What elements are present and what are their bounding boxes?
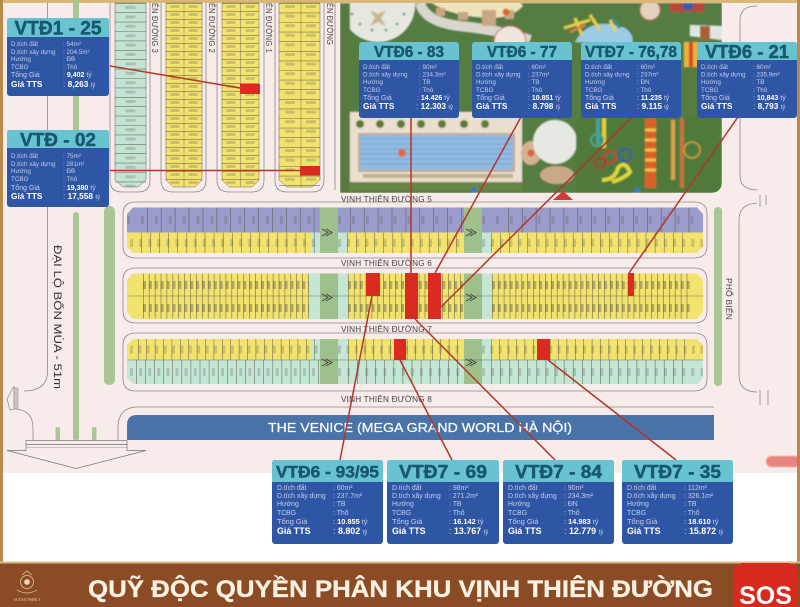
card: VTĐ6 - 83: : 14.426 tỷ	[417, 95, 450, 102]
card: VTĐ7 - 76,78: VTĐ7 - 76,78	[585, 44, 677, 61]
card: VTĐ7 - 76,78: : 11.235 tỷ	[637, 95, 670, 102]
SOS button	[733, 563, 798, 607]
card: VTĐ7 - 84: Giá TTS	[508, 526, 542, 536]
card: VTĐ7 - 69: TCBG	[392, 510, 411, 517]
road labels: VỊNH THIÊN ĐƯỜNG 8	[341, 394, 432, 404]
card: VTĐ7 - 84	[503, 460, 614, 544]
card: VTĐ7 - 84: : 14.983 tỷ	[564, 517, 599, 526]
road labels: ÊN ĐƯỜNG	[325, 3, 335, 45]
road labels: VỊNH THIÊN ĐƯỜNG 6	[341, 258, 432, 268]
card: VTĐ7 - 76,78: : 237m²	[637, 72, 658, 78]
card: VTĐ6 - 93/95: D.tích xây dựng	[277, 493, 326, 500]
road labels: PHỐ BIỂN	[724, 278, 735, 320]
card: VTĐ7 - 35: Hướng	[627, 501, 649, 508]
card: VTĐ7 - 35	[622, 460, 733, 544]
card: VTĐ6 - 83: : TB	[419, 79, 430, 86]
card: VTĐ - 02: : 19,380 tỷ	[63, 185, 96, 192]
card: VTĐ7 - 84: : 90m²	[564, 485, 584, 492]
road labels	[150, 3, 735, 404]
card: VTĐ7 - 69	[387, 460, 499, 544]
gate west	[7, 386, 18, 410]
card: VTĐ - 02: : 281m²	[63, 161, 84, 168]
road labels: VỊNH THIÊN ĐƯỜNG 5	[341, 194, 432, 204]
card: VTĐ7 - 69: : 271.2m²	[449, 493, 479, 500]
card: VTĐ1 - 25: D.tích xây dựng	[11, 49, 56, 56]
card: VTĐ6 - 93/95	[272, 460, 383, 544]
card: VTĐ6 - 83: : 234.3m²	[419, 72, 446, 78]
card: VTĐ7 - 69: : 16.142 tỷ	[449, 517, 484, 526]
card: VTĐ7 - 35: : TB	[684, 501, 697, 508]
card: VTĐ6 - 83: : Thô	[419, 87, 434, 94]
card: VTĐ7 - 35: : Thô	[684, 510, 700, 517]
card: VTĐ7 - 35: D.tích đất	[627, 483, 657, 492]
card: VTĐ7 - 84: D.tích xây dựng	[508, 493, 557, 500]
card: VTĐ - 02: Giá TTS	[11, 191, 43, 201]
card: VTĐ6 - 77: : TB	[528, 79, 539, 86]
south entrance arrow	[7, 440, 146, 468]
Venice boulevard bar	[127, 415, 714, 440]
card: VTĐ6 - 21: Tổng Giá	[701, 94, 730, 102]
card: VTĐ6 - 83: Giá TTS	[363, 101, 395, 111]
card: VTĐ7 - 69: : Thô	[449, 510, 465, 517]
card: VTĐ7 - 84: D.tích đất	[508, 483, 538, 492]
compass triangle	[553, 191, 573, 200]
card: VTĐ6 - 83: Tổng Giá	[363, 94, 392, 102]
card: VTĐ6 - 83: : 90m²	[419, 64, 437, 71]
card: VTĐ6 - 93/95: : TB	[333, 501, 346, 508]
card: VTĐ7 - 76,78: : 9.115 tỷ	[637, 101, 669, 111]
card: VTĐ6 - 77: : Thô	[528, 87, 543, 94]
road labels: ÊN ĐƯỜNG 1	[264, 3, 274, 53]
card: VTĐ1 - 25: : 204.5m²	[63, 49, 90, 56]
card: VTĐ7 - 69: Tổng Giá	[392, 517, 423, 526]
card: VTĐ6 - 21: VTĐ6 - 21	[705, 42, 789, 62]
card: VTĐ6 - 93/95: VTĐ6 - 93/95	[276, 464, 379, 482]
card: VTĐ6 - 83: D.tích xây dựng	[363, 72, 408, 78]
card: VTĐ1 - 25: Giá TTS	[11, 79, 43, 89]
card: VTĐ6 - 21	[697, 42, 797, 118]
card: VTĐ - 02: Hướng	[11, 168, 31, 175]
card: VTĐ1 - 25: : 8,263 tỷ	[63, 79, 95, 89]
card: VTĐ7 - 76,78: D.tích xây dựng	[585, 72, 630, 78]
card: VTĐ - 02: VTĐ - 02	[20, 130, 96, 150]
card: VTĐ - 02: TCBG	[11, 176, 29, 183]
card: VTĐ7 - 69: Giá TTS	[392, 526, 426, 536]
footer band	[0, 562, 800, 607]
card: VTĐ7 - 69: : 13.767 tỷ	[449, 526, 488, 536]
card: VTĐ7 - 84: Hướng	[508, 501, 530, 508]
card: VTĐ - 02: D.tích xây dựng	[11, 161, 56, 168]
card: VTĐ7 - 35: Tổng Giá	[627, 517, 658, 526]
card: VTĐ7 - 76,78: TCBG	[585, 87, 603, 94]
card: VTĐ6 - 77: D.tích đất	[476, 62, 503, 71]
road labels: ÊN ĐƯỜNG 3	[150, 3, 160, 53]
card: VTĐ1 - 25: VTĐ1 - 25	[14, 18, 102, 40]
lot block: vertical green	[115, 3, 146, 187]
card: VTĐ7 - 76,78: Giá TTS	[585, 101, 617, 111]
park illustration	[340, 0, 722, 193]
card: VTĐ6 - 77: Giá TTS	[476, 101, 508, 111]
card: VTĐ7 - 35: Giá TTS	[627, 526, 661, 536]
card: VTĐ7 - 76,78: Hướng	[585, 79, 605, 86]
card: VTĐ7 - 35: VTĐ7 - 35	[634, 462, 721, 482]
lot block: row between roads 6 and 7	[127, 274, 703, 319]
card: VTĐ7 - 84: VTĐ7 - 84	[515, 462, 602, 482]
card: VTĐ6 - 83: VTĐ6 - 83	[374, 44, 444, 61]
card: VTĐ7 - 69: D.tích xây dựng	[392, 493, 441, 500]
card: VTĐ6 - 77: : 60m²	[528, 64, 546, 71]
card: VTĐ6 - 83: TCBG	[363, 87, 381, 94]
card: VTĐ1 - 25	[7, 18, 109, 96]
highlighted lots	[240, 84, 634, 360]
card: VTĐ6 - 93/95: D.tích đất	[277, 483, 307, 492]
red smudge	[766, 456, 800, 467]
card: VTĐ7 - 69: VTĐ7 - 69	[399, 462, 487, 482]
card: VTĐ6 - 77: D.tích xây dựng	[476, 72, 521, 78]
card: VTĐ6 - 83: : 12.303 tỷ	[416, 101, 453, 111]
card: VTĐ7 - 35: : 15.872 tỷ	[684, 526, 723, 536]
card: VTĐ - 02: : 17,558 tỷ	[63, 191, 100, 201]
card: VTĐ6 - 93/95: : 10.855 tỷ	[333, 517, 368, 526]
lot block: vertical yellow 1	[166, 3, 202, 187]
card: VTĐ6 - 77: : 10.851 tỷ	[528, 95, 561, 102]
card: VTĐ6 - 21: : 235,9m²	[753, 72, 780, 78]
card: VTĐ7 - 84: TCBG	[508, 510, 527, 517]
card: VTĐ6 - 93/95: TCBG	[277, 510, 296, 517]
card: VTĐ1 - 25: : ĐB	[63, 56, 75, 63]
card: VTĐ6 - 93/95: Giá TTS	[277, 526, 311, 536]
footer title: QUỸ ĐỘC QUYỀN PHÂN KHU VỊNH THIÊN ĐƯỜNG	[88, 575, 713, 603]
boulevard label: ĐẠI LỘ BỐN MÙA - 51m	[51, 245, 65, 389]
card: VTĐ1 - 25: : 9,402 tỷ	[63, 72, 92, 79]
card: VTĐ6 - 77: VTĐ6 - 77	[487, 44, 557, 61]
card: VTĐ7 - 35: TCBG	[627, 510, 646, 517]
card: VTĐ6 - 77: : 8.798 tỷ	[528, 101, 560, 111]
card: VTĐ6 - 21: Hướng	[701, 79, 721, 86]
card: VTĐ7 - 84: Tổng Giá	[508, 517, 539, 526]
card: VTĐ6 - 77: Hướng	[476, 79, 496, 86]
card: VTĐ6 - 83	[359, 42, 459, 118]
card: VTĐ6 - 93/95: : 237.7m²	[333, 493, 363, 500]
card: VTĐ6 - 21: TCBG	[701, 87, 719, 94]
card: VTĐ - 02: Tổng Giá	[11, 184, 40, 192]
card: VTĐ7 - 76,78: : Thô	[637, 87, 652, 94]
card: VTĐ7 - 76,78: : 60m²	[637, 64, 655, 71]
card: VTĐ - 02: : Thô	[63, 176, 78, 183]
lot block: vertical yellow 2	[222, 3, 259, 187]
card: VTĐ6 - 21: : TB	[753, 79, 764, 86]
card: VTĐ7 - 84: : 12.779 tỷ	[564, 526, 603, 536]
card: VTĐ6 - 77	[472, 42, 572, 118]
card: VTĐ7 - 35: : 112m²	[684, 485, 708, 492]
road labels: ÊN ĐƯỜNG 2	[207, 3, 217, 53]
leader lines	[110, 66, 738, 460]
card: VTĐ1 - 25: : 54m²	[63, 41, 81, 48]
card: VTĐ6 - 77: : 237m²	[528, 72, 549, 78]
card: VTĐ7 - 76,78	[581, 42, 681, 118]
card: VTĐ6 - 21: : Thô	[753, 87, 768, 94]
road labels: VỊNH THIÊN ĐƯỜNG 7	[341, 324, 432, 334]
card: VTĐ7 - 35: D.tích xây dựng	[627, 493, 676, 500]
card: VTĐ1 - 25: Tổng Giá	[11, 71, 40, 79]
card: VTĐ - 02: D.tích đất	[11, 151, 38, 160]
card: VTĐ6 - 21: : 10,843 tỷ	[753, 95, 786, 102]
card: VTĐ - 02	[7, 130, 109, 207]
footer logo	[14, 571, 40, 602]
card: VTĐ1 - 25: D.tích đất	[11, 39, 38, 48]
card: VTĐ6 - 83: D.tích đất	[363, 62, 390, 71]
card: VTĐ7 - 35: : 18.610 tỷ	[684, 517, 719, 526]
lot block: vertical yellow 3	[279, 3, 320, 187]
card: VTĐ7 - 35: : 326.1m²	[684, 493, 714, 500]
card: VTĐ - 02: : 75m²	[63, 153, 81, 160]
card: VTĐ1 - 25: : Thô	[63, 64, 78, 71]
card: VTĐ6 - 21: D.tích đất	[701, 62, 728, 71]
footer logo: OCEAN PARK 3	[14, 598, 40, 602]
card: VTĐ7 - 84: : 234.3m²	[564, 493, 594, 500]
card: VTĐ7 - 69: : TB	[449, 501, 462, 508]
card: VTĐ6 - 21: D.tích xây dựng	[701, 72, 746, 78]
card: VTĐ6 - 93/95: Hướng	[277, 501, 299, 508]
card: VTĐ7 - 69: D.tích đất	[392, 483, 422, 492]
green median strips	[56, 0, 722, 441]
card: VTĐ6 - 77: Tổng Giá	[476, 94, 505, 102]
card: VTĐ7 - 84: : Thô	[564, 510, 580, 517]
card: VTĐ6 - 83: Hướng	[363, 79, 383, 86]
card: VTĐ7 - 69: : 98m²	[449, 485, 469, 492]
card: VTĐ6 - 21: : 8,793 tỷ	[753, 101, 785, 111]
card: VTĐ7 - 84: : ĐN	[564, 501, 578, 508]
road outlines	[15, 3, 768, 440]
card: VTĐ6 - 93/95: Tổng Giá	[277, 517, 308, 526]
card: VTĐ7 - 69: Hướng	[392, 501, 414, 508]
path arrows	[322, 229, 476, 366]
card: VTĐ7 - 76,78: D.tích đất	[585, 62, 612, 71]
card: VTĐ6 - 77: TCBG	[476, 87, 494, 94]
card: VTĐ7 - 76,78: Tổng Giá	[585, 94, 614, 102]
card: VTĐ6 - 21: Giá TTS	[701, 101, 733, 111]
card: VTĐ1 - 25: TCBG	[11, 64, 29, 71]
card: VTĐ6 - 21: : 60m²	[753, 64, 771, 71]
card: VTĐ - 02: : ĐB	[63, 168, 75, 175]
lot block: row between roads 7 and 8	[127, 339, 703, 384]
card: VTĐ6 - 93/95: : 60m²	[333, 485, 353, 492]
map background	[0, 0, 800, 473]
Venice boulevard bar: THE VENICE (MEGA GRAND WORLD HÀ NỘI)	[268, 420, 572, 435]
card: VTĐ1 - 25: Hướng	[11, 56, 31, 63]
card: VTĐ6 - 93/95: : Thô	[333, 510, 349, 517]
card: VTĐ7 - 76,78: : ĐN	[637, 79, 650, 86]
lot block: row between roads 5 and 6	[127, 208, 703, 254]
card: VTĐ6 - 93/95: : 8.802 tỷ	[333, 526, 367, 536]
